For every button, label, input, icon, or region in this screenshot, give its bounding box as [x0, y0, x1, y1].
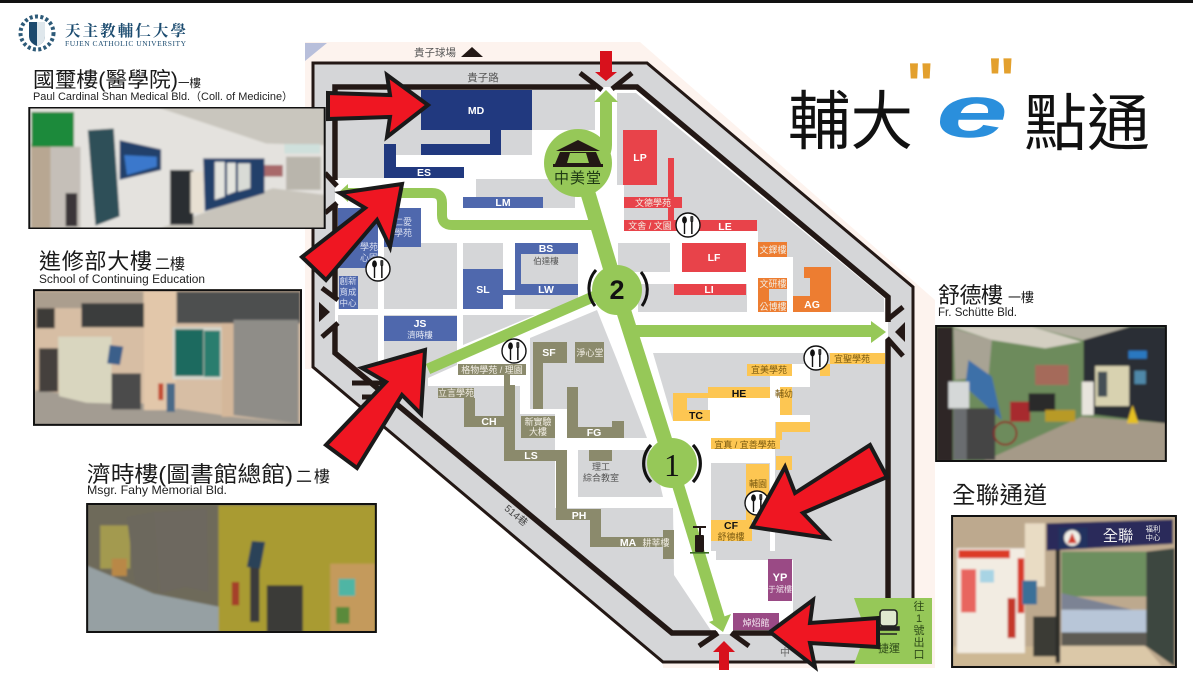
- label: Zhongmei Hall: 中美堂: [554, 170, 602, 187]
- label: to exit 1: 號: [914, 624, 924, 637]
- logo wordmark: [65, 21, 187, 48]
- building labels: BS: [539, 243, 553, 255]
- top black edge: [0, 0, 1193, 3]
- building labels: LM: [495, 197, 511, 209]
- caption: Medical Building: 國璽樓(醫學院): [33, 69, 178, 92]
- building labels: MA: [620, 537, 637, 549]
- building labels: 于斌樓: [768, 584, 792, 594]
- icon: restaurant east: [804, 346, 828, 370]
- caption: School of Continuing Education: School of Continuing Education: [39, 274, 205, 286]
- red arrow to Fahy Memorial: [326, 350, 425, 468]
- building labels: 文研樓: [759, 278, 787, 289]
- building labels: 創新: [339, 276, 357, 286]
- building labels: LF: [708, 252, 721, 264]
- building labels: YP: [773, 572, 787, 584]
- route stop 1: 1: [664, 447, 680, 483]
- orange buildings: [758, 242, 831, 312]
- building labels: 大樓: [529, 426, 547, 437]
- caption: Schutte Building: 一樓: [1008, 290, 1034, 305]
- logo wordmark: FUJEN CATHOLIC UNIVERSITY: [65, 39, 187, 48]
- caption: Medical Building: 一樓: [178, 76, 201, 90]
- building labels: 理工: [592, 462, 610, 472]
- building labels: JS: [414, 318, 426, 330]
- small red entry arrow: south: [713, 641, 735, 670]
- logo: Fu Jen Catholic University: [20, 16, 187, 50]
- building labels: 立言學苑: [438, 387, 474, 398]
- building labels: PH: [572, 510, 586, 522]
- MRT exit panel: [854, 598, 932, 664]
- map peach background: [305, 42, 935, 668]
- building labels: 宜聖學苑: [834, 353, 870, 364]
- red arrow to Medical Building: [328, 75, 428, 137]
- building labels: AG: [804, 299, 820, 311]
- photo: Fahy Memorial: [86, 503, 377, 633]
- building labels: ES: [417, 167, 431, 179]
- building labels: 學苑: [394, 227, 412, 238]
- building labels: 格物學苑 / 理園: [461, 364, 523, 375]
- building labels: 宜真 / 宜善學苑: [714, 439, 776, 450]
- building labels: 中心: [339, 298, 357, 308]
- caption: Schutte Building: [938, 283, 1034, 319]
- building labels: 輔園: [749, 478, 767, 489]
- building labels: CF: [724, 520, 739, 532]
- blue buildings: [338, 197, 578, 341]
- building labels: [339, 105, 870, 628]
- photo: PX Mart passage: 全聯: [1103, 528, 1133, 545]
- label: to exit 1: 往: [914, 599, 924, 613]
- caption: Fahy Memorial: 濟時樓(圖書館總館): [87, 462, 293, 487]
- title: ": [987, 46, 1015, 113]
- building labels: HE: [732, 388, 746, 400]
- road labels: 貴子路: [467, 71, 499, 84]
- icon: university crest: [20, 16, 54, 50]
- building labels: LS: [524, 450, 538, 462]
- building labels: LW: [538, 284, 554, 296]
- building labels: LE: [718, 221, 732, 233]
- red arrow to Continuing Education: [302, 184, 402, 280]
- building labels: TC: [689, 410, 703, 422]
- building labels: 文舍 / 文園: [628, 220, 672, 231]
- building labels: 仁愛: [394, 216, 412, 227]
- photo: PX Mart passage: 福利: [1146, 525, 1160, 534]
- building labels: 淨心堂: [576, 347, 604, 358]
- caption: School of Continuing Education: 二樓: [155, 256, 185, 273]
- caption: Fahy Memorial: Msgr. Fahy Memorial Bld.: [87, 483, 227, 497]
- label: to exit 1: 出: [914, 635, 924, 649]
- title: e: [936, 70, 1008, 153]
- photo: PX Mart passage: 中心: [1146, 533, 1161, 542]
- building labels: 新實驗: [524, 416, 552, 427]
- red arrow to PX Mart passage: [770, 600, 878, 667]
- caption: Fahy Memorial: 二樓: [296, 468, 330, 486]
- route stop 2: 2: [609, 275, 625, 305]
- red buildings: [623, 130, 757, 295]
- photo: PX Mart passage: [951, 515, 1177, 668]
- photo: Schutte Building: [935, 325, 1167, 462]
- corner marker: [305, 43, 327, 61]
- logo wordmark: 天主教輔仁大學: [65, 21, 186, 40]
- red arrow to Schutte Building: [752, 445, 887, 538]
- building labels: 輔幼: [775, 388, 793, 399]
- black road lines: [335, 87, 888, 633]
- photo: School of Continuing Education: [33, 289, 302, 426]
- route stop 1: [644, 445, 700, 483]
- building labels: SF: [542, 347, 556, 359]
- icon: restaurant north-east: [676, 213, 700, 237]
- route stop 2: [589, 270, 647, 306]
- title: 輔大: [788, 71, 913, 163]
- purple buildings: [733, 559, 792, 630]
- building labels: 公博樓: [759, 301, 787, 312]
- small red entry arrow: north: [595, 51, 617, 81]
- building labels: 心園: [360, 253, 378, 263]
- icon: Zhongmei Hall: [553, 140, 603, 187]
- photo: Medical Building: [28, 107, 326, 229]
- building labels: 舒德樓: [717, 531, 745, 542]
- yellow buildings: [673, 353, 885, 541]
- ring road: [313, 63, 913, 662]
- icon: restaurant central: [502, 339, 526, 363]
- caption: Schutte Building: 舒德樓: [938, 283, 1003, 308]
- building labels: 育成: [339, 287, 357, 297]
- icon: restaurant Fu Garden: [745, 491, 769, 515]
- caption: School of Continuing Education: 進修部大樓: [39, 249, 152, 274]
- caption: School of Continuing Education: [39, 249, 205, 286]
- label: to exit 1: [914, 599, 924, 661]
- olive buildings: [438, 342, 674, 559]
- road labels: 514巷: [502, 503, 530, 529]
- label: to exit 1: 口: [914, 649, 924, 661]
- road labels: 貴子球場: [414, 46, 456, 59]
- building labels: 學苑: [360, 241, 378, 252]
- building labels: 濟時樓: [407, 330, 433, 340]
- building labels: 綜合教室: [583, 472, 619, 483]
- icon: restaurant west: [366, 257, 390, 281]
- building labels: LP: [633, 152, 647, 164]
- caption: Medical Building: [33, 69, 293, 103]
- road labels: 中: [780, 646, 790, 659]
- road labels: [414, 46, 790, 659]
- caption: Medical Building: Paul Cardinal Shan Medical Bld.（Coll. of Medicine）: [33, 90, 293, 103]
- title: ": [906, 51, 934, 118]
- grey land blocks: [338, 90, 885, 633]
- building labels: 伯達樓: [533, 256, 559, 266]
- building labels: MD: [468, 105, 485, 117]
- caption: PX Mart passage: 全聯通道: [952, 482, 1047, 508]
- building labels: LI: [704, 284, 714, 296]
- campus interior: [335, 87, 888, 634]
- building labels: 宜美學苑: [751, 364, 787, 375]
- building labels: 焯炤館: [742, 617, 770, 628]
- caption: Fahy Memorial: [87, 462, 330, 497]
- icon: air pump: [690, 526, 709, 554]
- building labels: SL: [476, 284, 490, 296]
- label: MRT: 捷運: [878, 641, 900, 655]
- label: to exit 1: 1: [916, 613, 922, 625]
- building labels: 文德學苑: [635, 197, 671, 208]
- building labels: FG: [587, 427, 601, 439]
- campus map: [302, 42, 935, 670]
- green walking routes: [338, 90, 886, 632]
- caption: Schutte Building: Fr. Schütte Bld.: [938, 307, 1017, 319]
- gate marks: [319, 73, 905, 646]
- title: 點通: [1024, 73, 1150, 163]
- building labels: 文鐸樓: [759, 244, 787, 255]
- building labels: 耕莘樓: [642, 537, 670, 548]
- icon: train: [878, 610, 899, 634]
- title: [788, 46, 1150, 163]
- building labels: CH: [481, 416, 497, 428]
- navy buildings: MD and ES: [384, 90, 532, 178]
